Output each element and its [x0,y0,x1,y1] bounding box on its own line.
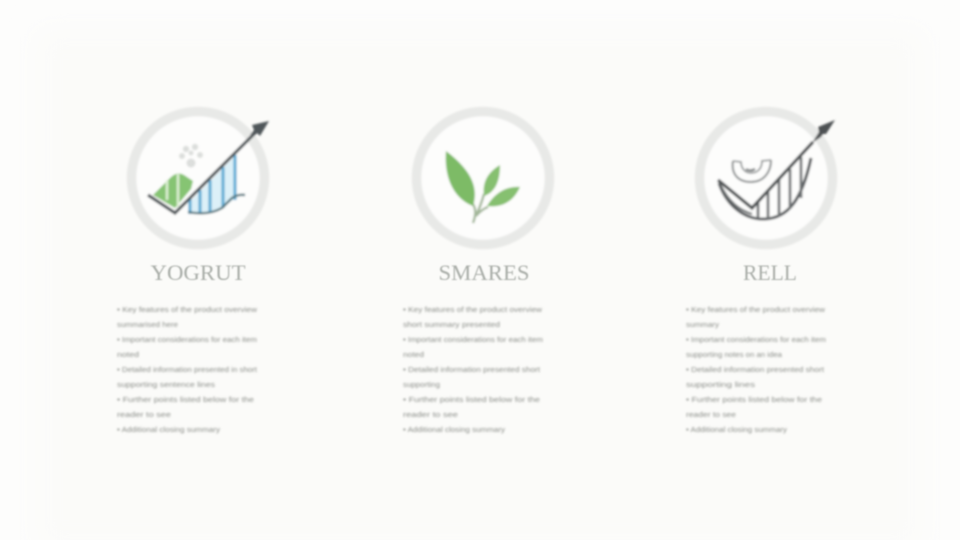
text block: smares notes: short summary presented [403,322,500,329]
panel: rell column [686,112,835,434]
panel: shares column [403,112,550,434]
text block: smares notes: • Detailed information presented short [403,367,540,374]
text block: rell notes: reader to see [686,412,736,419]
text block: smares notes: noted [403,352,424,359]
text block: yogurt notes: supporting sentence lines [117,382,216,389]
text block: smares notes: • Further points listed below for the [403,397,540,404]
text block: yogurt notes: reader to see [117,412,171,419]
text block: smares notes: • Important considerations for each item [403,337,543,344]
text block: rell notes: supporting lines [686,382,756,389]
panel: yogurt column [117,112,269,434]
text block: rell notes: • Additional closing summary [686,427,788,434]
text block: yogurt notes: summarised here [117,322,178,329]
icon: green sprout in ring [416,112,550,244]
text block: yogurt notes: • Additional closing summary [117,427,221,434]
icon: hammock check in ring [700,112,835,244]
text block: yogurt notes: • Detailed information presented in short [117,367,257,374]
heading: rell: RELL [743,260,797,285]
text block: smares notes [403,307,543,434]
text block: smares notes: reader to see [403,412,458,419]
text block: smares notes: supporting [403,382,440,389]
text block: rell notes: supporting notes on an idea [686,352,782,359]
text block: smares notes: • Additional closing summary [403,427,506,434]
heading: yogurt: YOGRUT [150,260,246,285]
heading: smares: SMARES [438,260,530,285]
text block: yogurt notes: • Key features of the product overview [117,307,258,314]
text block: rell notes: • Further points listed below for the [686,397,822,404]
text block: yogurt notes [117,307,258,434]
text block: yogurt notes: noted [117,352,139,359]
text block: rell notes: • Key features of the product overview [686,307,826,314]
text block: rell notes: • Important considerations for each item [686,337,826,344]
text block: smares notes: • Key features of the product overview [403,307,543,314]
icon: growth chart in ring [132,112,269,244]
text block: rell notes: • Detailed information presented short [686,367,824,374]
text block: rell notes [686,307,826,434]
text block: rell notes: summary [686,322,720,329]
text block: yogurt notes: • Important considerations for each item [117,337,257,344]
text block: yogurt notes: • Further points listed below for the [117,397,254,404]
